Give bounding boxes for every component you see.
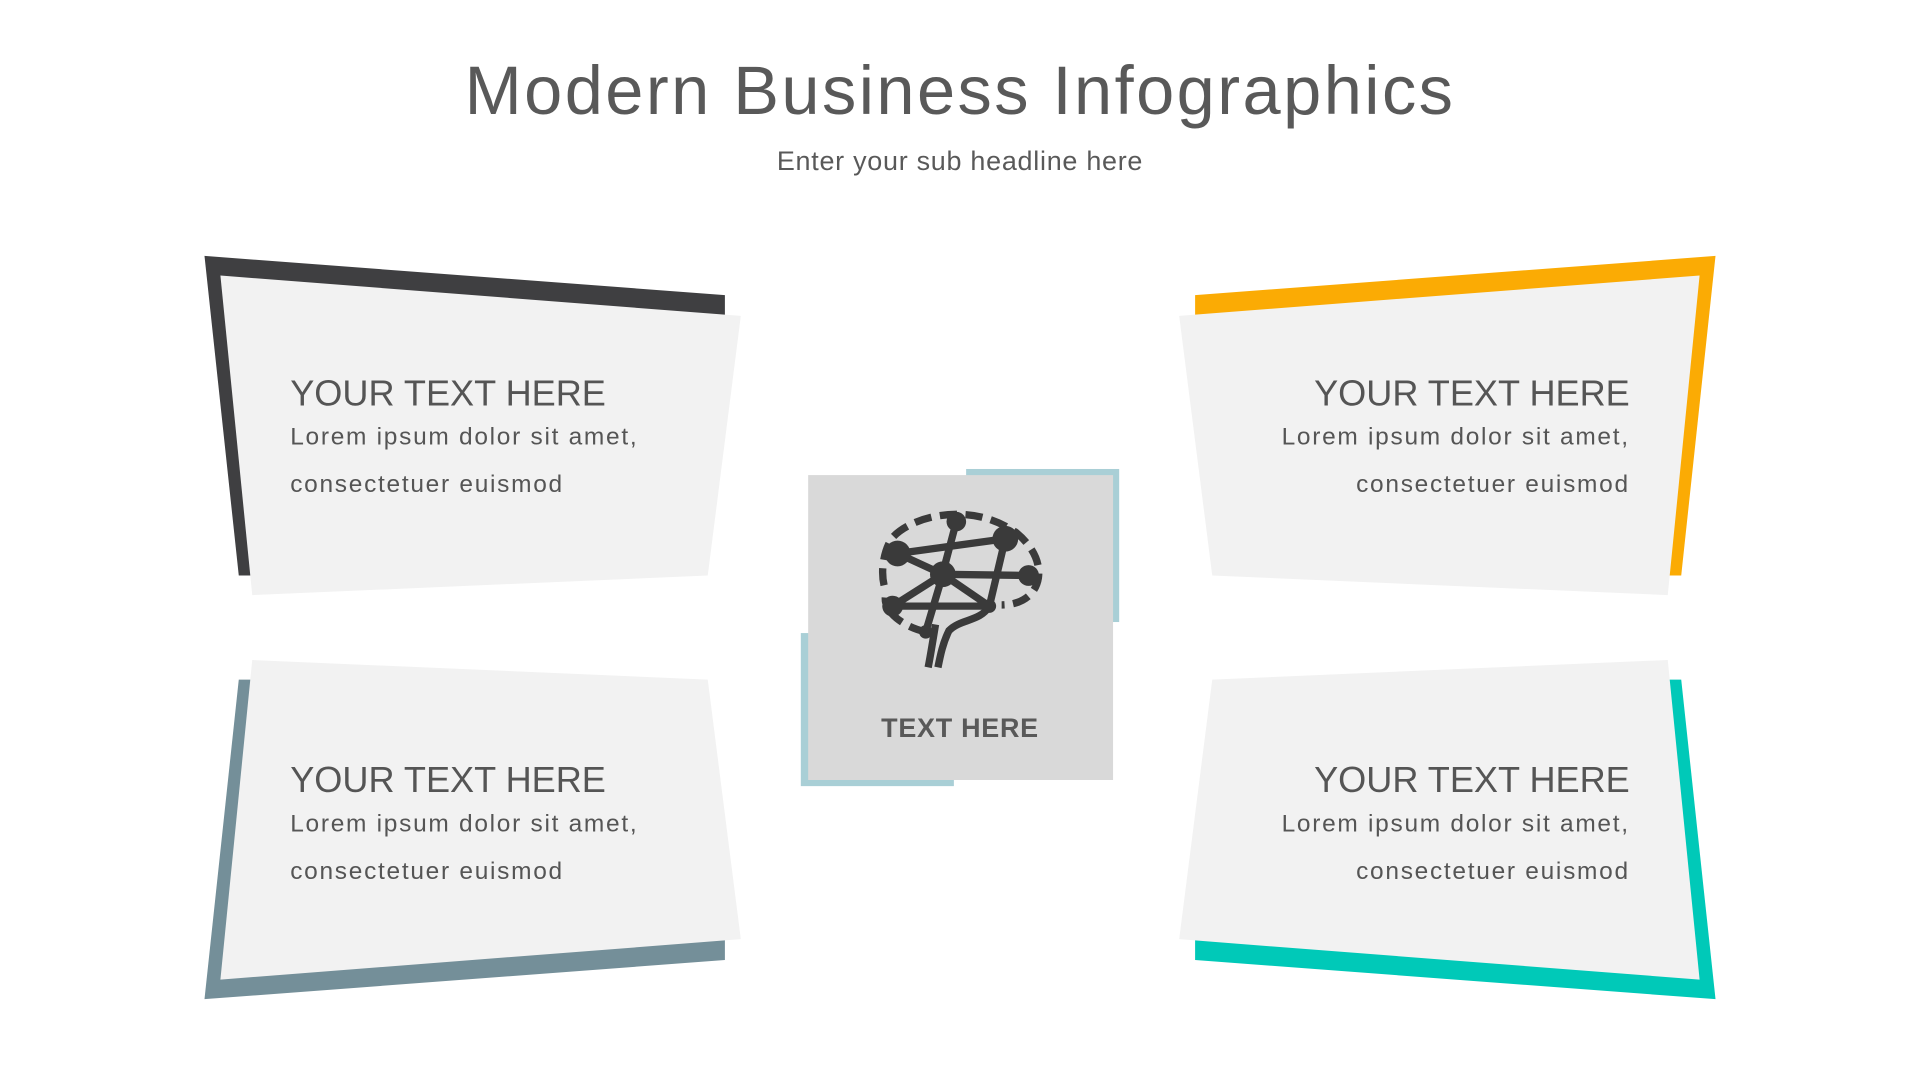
body: bottom-left: consectetuer euismod xyxy=(290,858,564,885)
center box xyxy=(801,469,1119,786)
heading: bottom-left: YOUR TEXT HERE xyxy=(290,759,606,800)
panel: top-left xyxy=(204,256,741,595)
body: bottom-right: Lorem ipsum dolor sit amet, xyxy=(1282,810,1630,837)
body: bottom-right: consectetuer euismod xyxy=(1356,858,1630,885)
center label: TEXT HERE xyxy=(881,713,1039,743)
heading: bottom-right: YOUR TEXT HERE xyxy=(1314,759,1630,800)
body: bottom-left: Lorem ipsum dolor sit amet, xyxy=(290,810,638,837)
icon: brain network xyxy=(883,514,1039,667)
body: top-right: Lorem ipsum dolor sit amet, xyxy=(1282,423,1630,450)
panel: bottom-left xyxy=(204,660,741,999)
body: top-left: consectetuer euismod xyxy=(290,471,564,498)
subtitle: Enter your sub headline here xyxy=(777,146,1143,176)
heading: top-right: YOUR TEXT HERE xyxy=(1314,372,1630,413)
body: top-left: Lorem ipsum dolor sit amet, xyxy=(290,423,638,450)
title: Modern Business Infographics xyxy=(465,52,1455,129)
body: top-right: consectetuer euismod xyxy=(1356,471,1630,498)
heading: top-left: YOUR TEXT HERE xyxy=(290,372,606,413)
panel: bottom-right xyxy=(1179,660,1716,999)
panel: top-right xyxy=(1179,256,1716,595)
